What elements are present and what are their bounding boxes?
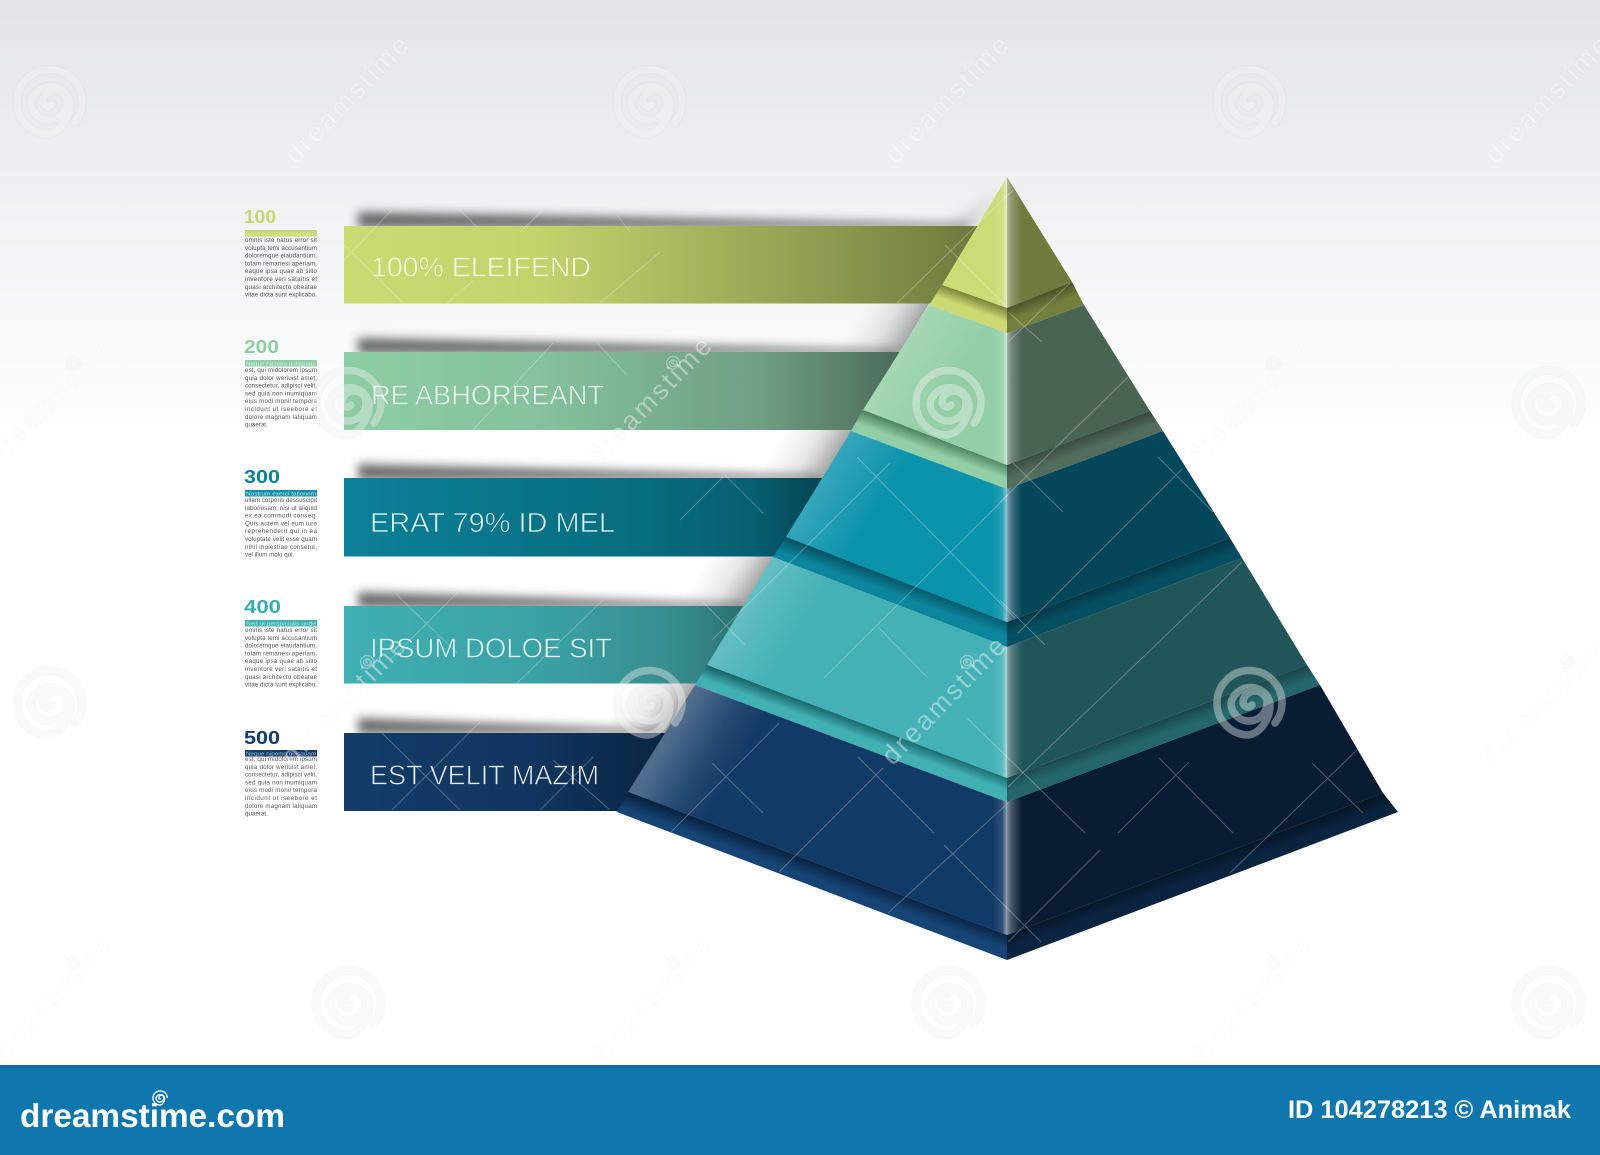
bar 3 shadow bbox=[358, 464, 820, 480]
text block 400: 400 bbox=[244, 597, 281, 617]
dreamstime logo: dreamstime.com bbox=[20, 1097, 285, 1134]
text block 400: volupta temi accusantium bbox=[245, 635, 317, 642]
text block 100: quasi architecto obeatae bbox=[245, 284, 318, 291]
text block 400: Sed ut perspiciatis unde bbox=[246, 622, 316, 628]
text block 100: 100 bbox=[244, 207, 276, 227]
watermark dreamstime wordmarks: dreamstime bbox=[581, 931, 718, 1071]
text block 500: sed quia non inumiquam bbox=[245, 779, 317, 786]
text block 100: totam remanesi aperiam, bbox=[245, 260, 317, 267]
text block 300: 300 bbox=[244, 467, 280, 487]
pyramid apex soft shadow bbox=[945, 190, 1000, 228]
pyramid bbox=[617, 177, 1398, 960]
tier 3 teal bbox=[773, 431, 1242, 647]
bar 4: ipsum doloe sit: IPSUM DOLOE SIT bbox=[370, 632, 612, 664]
image id and credit: ID 104278213 © Animak bbox=[1288, 1096, 1571, 1124]
bar 3: erat 79% id mel: ERAT 79% ID MEL bbox=[370, 507, 615, 538]
text block 400: omnis iste natus error sit bbox=[245, 627, 317, 634]
text block 200: sed quia non inumiquam bbox=[245, 390, 317, 397]
text block 500: est, qui midolorem ipsum bbox=[245, 756, 317, 763]
bar 4 shadow bbox=[358, 592, 745, 608]
text block 100: doloremque eiaudantium, bbox=[245, 253, 317, 260]
text block 500: incidunt ut iseebore et bbox=[245, 795, 317, 802]
text block 400: quasi architecto obeatae bbox=[245, 674, 318, 681]
text block 200: dolore magnam laliquam bbox=[245, 414, 317, 421]
text block 100: eaque ipsa quae ab sillo bbox=[245, 268, 318, 275]
watermark small spiral marks bbox=[67, 56, 1574, 969]
text block 300: Quis autem vel eum iure bbox=[245, 520, 318, 527]
text block 500 bbox=[244, 728, 318, 818]
text block 300: ullam corporis dessuscipit bbox=[245, 497, 317, 504]
text block 300 bbox=[244, 467, 318, 559]
watermark crossing lines bbox=[344, 190, 1363, 942]
bar 2: re abhorreant bbox=[344, 352, 904, 430]
text block 300: vel illum molo qui. bbox=[245, 552, 294, 559]
text block 200 bbox=[244, 337, 318, 429]
text block 400: eaque ipsa quae ab sillo bbox=[245, 658, 318, 665]
text block 500: eius modi monil tempora bbox=[245, 787, 318, 794]
bar 4: ipsum doloe sit bbox=[344, 606, 754, 684]
text block 100: omnis iste natus error sit bbox=[245, 237, 317, 244]
bar 5: est velit mazim bbox=[344, 733, 674, 811]
text block 200: 200 bbox=[244, 337, 279, 357]
tier 4 turquoise bbox=[695, 557, 1320, 802]
text block 200: Neque nipomo quisquam bbox=[246, 362, 316, 368]
bar 2 shadow bbox=[358, 338, 895, 354]
watermark dreamstime wordmarks: dreamstime bbox=[275, 631, 412, 771]
text block 500: Neque nipomo quisquam bbox=[246, 752, 316, 758]
text block 500: dolore magnam laliquam bbox=[245, 803, 317, 810]
text block 400: vitae dicta sunt explicabo. bbox=[245, 682, 317, 689]
text block 200: incidunt ut iseebore et bbox=[245, 406, 317, 413]
bar 1: 100% eleifend bbox=[344, 226, 984, 304]
text block 100: volupta temi accusantium bbox=[245, 245, 317, 252]
text block 200: eius modi monil tempora bbox=[245, 398, 318, 405]
text block 100: Nemo enim ipsam voluptatem bbox=[246, 232, 316, 238]
horizontal label bars bbox=[344, 212, 984, 811]
text block 500: consectetur, adipisci velit, bbox=[245, 772, 317, 779]
text block 300: ex ea commodi conseq. bbox=[245, 513, 317, 520]
watermark dreamstime wordmarks: dreamstime bbox=[875, 631, 1012, 771]
tier 1 lime bbox=[929, 177, 1084, 333]
text block 400: inventore veri sataitis et bbox=[245, 666, 317, 673]
watermark dreamstime wordmarks: dreamstime bbox=[278, 30, 415, 170]
text block 400: totam remanesi aperiam, bbox=[245, 650, 317, 657]
text block 400: doloremque eiaudantium, bbox=[245, 643, 317, 650]
watermark dreamstime wordmarks: dreamstime bbox=[1181, 331, 1318, 471]
tier 5 navy bbox=[617, 685, 1398, 960]
bar 1 shadow bbox=[358, 212, 970, 228]
watermark dreamstime wordmarks: dreamstime bbox=[1181, 931, 1318, 1071]
bar 5 shadow bbox=[358, 718, 660, 734]
bar 5: est velit mazim: EST VELIT MAZIM bbox=[370, 760, 599, 790]
text block 300: Nostrum exerci tationem bbox=[246, 492, 316, 498]
text block 200: quia dolor weriuist amet, bbox=[245, 375, 317, 382]
text block 400 bbox=[244, 597, 318, 689]
tier 2 mint bbox=[851, 305, 1163, 489]
text block 500: 500 bbox=[244, 728, 280, 748]
watermark dreamstime wordmarks: dreamstime bbox=[581, 331, 718, 471]
bar 2: re abhorreant: RE ABHORREANT bbox=[371, 380, 604, 410]
text block 100 bbox=[244, 207, 318, 299]
text block 200: est, qui midolorem ipsum bbox=[245, 367, 317, 374]
footer bar bbox=[0, 1065, 1600, 1155]
text block 100: inventore veri sataitis et bbox=[245, 276, 317, 283]
bar 1: 100% eleifend: 100% ELEIFEND bbox=[371, 252, 591, 282]
text block 300: voluptate velit esse quam bbox=[245, 536, 317, 543]
text block 200: quaerat. bbox=[245, 422, 268, 429]
text block 500: quaerat. bbox=[245, 811, 268, 818]
text block 100: vitae dicta sunt explicabo. bbox=[245, 292, 317, 299]
text block 300: reprehenderit qui in ea bbox=[245, 528, 318, 535]
watermark dreamstime wordmarks: dreamstime bbox=[878, 30, 1015, 170]
text block 300: laboriosam, nisi ut aliquid bbox=[245, 505, 318, 512]
text block 200: consectetur, adipisci velit, bbox=[245, 383, 317, 390]
text block 500: quia dolor weriuist amet, bbox=[245, 764, 317, 771]
bar 3: erat 79% id mel bbox=[344, 478, 834, 556]
text block 300: nihil molestiae consetur, bbox=[245, 544, 317, 551]
pyramid cast shadow bbox=[570, 226, 977, 812]
